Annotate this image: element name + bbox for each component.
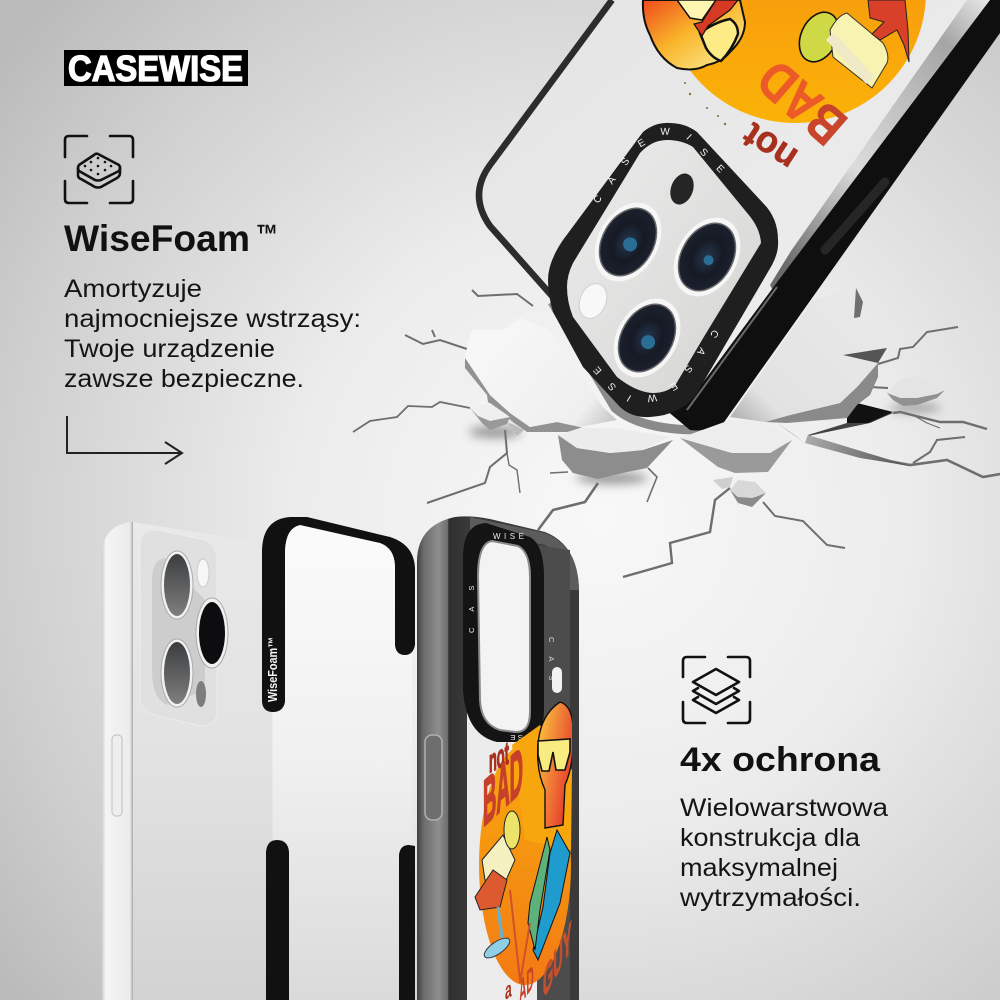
centre-right slab bbox=[680, 420, 792, 473]
artwork text: not: not bbox=[735, 115, 804, 180]
skull artwork bbox=[643, 0, 745, 69]
camera lens 3 bbox=[600, 287, 694, 389]
jacket bbox=[533, 830, 570, 960]
camera ring frame bbox=[463, 523, 544, 742]
small rock far left bbox=[470, 403, 524, 436]
tiny lower rock bbox=[713, 477, 733, 489]
left thin bumper bbox=[479, 0, 612, 305]
case clear back bbox=[467, 560, 537, 1000]
phone body bbox=[133, 522, 273, 1000]
right sheen band bbox=[770, 0, 1000, 300]
margarita artwork bbox=[792, 0, 909, 88]
ring brand text top: CASEWISE bbox=[594, 128, 725, 202]
camera ring bbox=[548, 122, 778, 418]
glass stem bbox=[498, 907, 502, 938]
speckle dots bbox=[684, 82, 726, 125]
side button bbox=[112, 735, 122, 816]
ring text top: WISE bbox=[493, 532, 527, 541]
artwork text: BAD: BAD bbox=[746, 48, 858, 156]
rock shadows bbox=[469, 404, 941, 484]
cracked wall crater bbox=[353, 288, 1000, 577]
lens top bbox=[161, 551, 193, 619]
text block: WiseFoam description bbox=[64, 275, 361, 393]
slab notch bbox=[854, 288, 863, 318]
small lower rock bbox=[730, 480, 766, 507]
sunglasses bbox=[538, 739, 570, 771]
white bare phone bbox=[102, 522, 273, 1000]
ring text right: CAS bbox=[547, 637, 556, 694]
heading: 4x ochrona: 4x ochrona bbox=[680, 741, 881, 779]
camera lens 2 bbox=[660, 206, 754, 308]
case shell bbox=[417, 516, 579, 1000]
glass base bbox=[484, 938, 510, 958]
upper phone with clear case bbox=[476, 0, 1000, 434]
lens right bbox=[196, 598, 228, 668]
clear inner panel bbox=[272, 521, 412, 1000]
trademark sign: ™ bbox=[256, 219, 278, 250]
centre-left slab bbox=[558, 428, 673, 479]
text block: 4x ochrona description: wytrzymałości. bbox=[679, 884, 861, 912]
text block: 4x ochrona description: Wielowarstwowa bbox=[680, 794, 888, 822]
crack wedge bbox=[805, 435, 910, 466]
text block: WiseFoam description: Twoje urządzenie bbox=[64, 335, 275, 363]
icon: layered stack bbox=[683, 657, 750, 723]
slab fissure bbox=[843, 348, 887, 363]
logo bbox=[64, 48, 248, 89]
margarita glass bbox=[482, 835, 515, 887]
front rock slabs bbox=[558, 420, 792, 507]
orange artwork disc bbox=[643, 0, 926, 125]
left rock slab bbox=[465, 318, 617, 432]
foam top section bbox=[262, 517, 415, 712]
skeleton hand bbox=[475, 870, 507, 910]
art text BAD: BAD bbox=[483, 732, 523, 842]
small rock right bbox=[887, 376, 945, 406]
hairline cracks bbox=[353, 290, 1000, 577]
right crater pit bbox=[777, 403, 910, 466]
ring text bottom: WISE bbox=[508, 733, 537, 742]
black WiseFoam frame bbox=[262, 517, 415, 1000]
jacket lapel bbox=[528, 837, 550, 950]
case top edge shade bbox=[470, 517, 579, 590]
camera lens 1 bbox=[581, 191, 675, 293]
right black bumper bbox=[660, 0, 1000, 430]
case dark back right bbox=[537, 545, 570, 1000]
text block: 4x ochrona description bbox=[679, 794, 888, 912]
heading: WiseFoam: WiseFoam bbox=[64, 218, 250, 259]
artwork bbox=[475, 702, 573, 985]
clear case back bbox=[479, 0, 1000, 426]
foam lower left strip bbox=[266, 840, 289, 1000]
text block: 4x ochrona description: maksymalnej bbox=[680, 854, 838, 882]
orange fill behind head bbox=[512, 725, 572, 850]
text block: WiseFoam description: najmocniejsze wstrząsy: bbox=[64, 305, 361, 333]
foam lower right strip bbox=[399, 845, 415, 1000]
side button bbox=[825, 182, 885, 250]
skeleton legs bbox=[510, 890, 530, 983]
arrow bbox=[67, 416, 182, 464]
artwork disc bbox=[479, 745, 571, 985]
camera flash bbox=[574, 279, 612, 323]
icon: foam pad bbox=[65, 136, 133, 203]
ring text left: CAS bbox=[467, 570, 476, 633]
translucent bumper base bbox=[552, 302, 700, 430]
camera bump bbox=[140, 530, 228, 726]
foam label: WiseFoam™ bbox=[266, 637, 280, 702]
art text not: not bbox=[489, 736, 509, 781]
case flash cutout bbox=[552, 667, 562, 693]
logo wordmark: CASEWISE bbox=[68, 48, 243, 89]
phone side frame bbox=[102, 522, 133, 1000]
bumper highlight stripe bbox=[687, 287, 777, 410]
sensor bbox=[196, 681, 206, 707]
text block: WiseFoam description: zawsze bezpieczne. bbox=[64, 365, 304, 393]
text block: WiseFoam description: Amortyzuje bbox=[64, 275, 202, 303]
ring brand text bottom: CASEWISE bbox=[593, 330, 718, 402]
camera sensor bbox=[666, 170, 698, 208]
right rock slab bbox=[730, 288, 887, 423]
flash bbox=[197, 559, 209, 587]
side button bbox=[425, 735, 442, 820]
skeleton head bbox=[538, 702, 573, 828]
black case side view bbox=[417, 516, 579, 1000]
lens bottom bbox=[161, 639, 193, 707]
text block: 4x ochrona description: konstrukcja dla bbox=[680, 824, 860, 852]
lime slice bbox=[504, 811, 520, 849]
